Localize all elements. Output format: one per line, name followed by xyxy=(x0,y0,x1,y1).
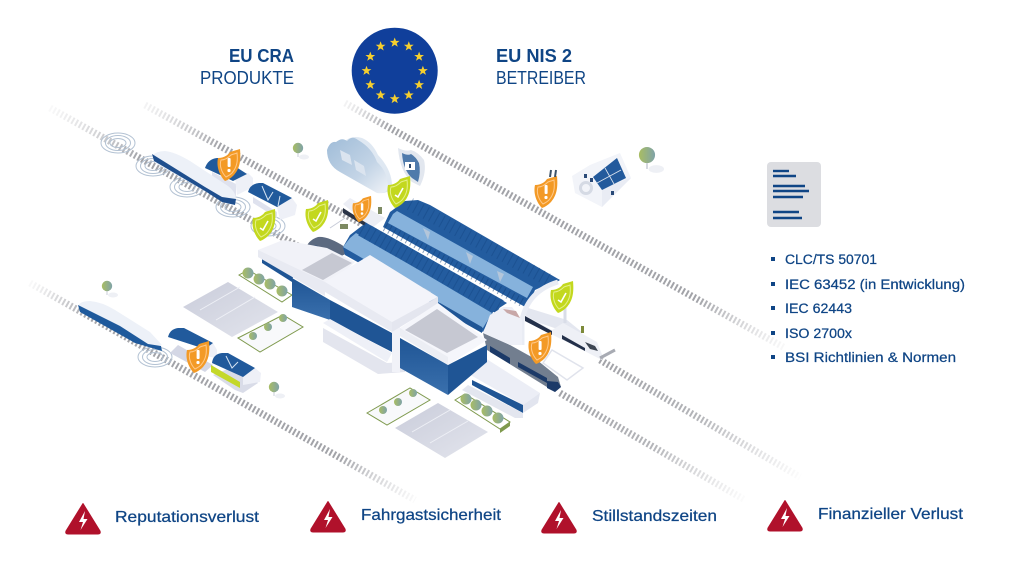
green plots with trees xyxy=(238,268,510,433)
risk: Stillstandszeiten xyxy=(542,502,717,533)
standards list xyxy=(771,252,965,365)
heading: EU NIS 2 Betreiber: EU NIS 2 xyxy=(496,46,572,66)
security shields xyxy=(186,149,573,373)
risk: Finanzieller Verlust xyxy=(768,500,964,531)
platform front xyxy=(462,358,540,418)
heading: EU NIS 2 Betreiber: BETREIBER xyxy=(496,68,586,88)
risk: Reputationsverlust: Reputationsverlust xyxy=(115,509,260,526)
wireless rings xyxy=(101,133,285,367)
station building xyxy=(258,240,487,395)
solar house xyxy=(572,153,631,207)
lock shield icon xyxy=(398,148,425,186)
small station roofs, upper xyxy=(205,158,297,220)
standards list: CLC/TS 50701 xyxy=(785,252,877,267)
risk: Fahrgastsicherheit: Fahrgastsicherheit xyxy=(361,507,502,524)
standards list: BSI Richtlinien & Normen xyxy=(785,350,956,365)
risk: Stillstandszeiten: Stillstandszeiten xyxy=(592,508,717,525)
risk: Finanzieller Verlust: Finanzieller Verlust xyxy=(818,506,964,523)
standards list: IEC 63452 (in Entwicklung) xyxy=(785,277,965,292)
heading: EU CRA Produkte xyxy=(200,46,294,88)
small back platform xyxy=(305,198,385,262)
flag: EU circle xyxy=(352,28,438,114)
heading: EU CRA Produkte: EU CRA xyxy=(229,46,294,66)
risk: Reputationsverlust xyxy=(66,504,260,534)
small train lower xyxy=(78,301,162,351)
front hall end xyxy=(483,307,522,345)
platform outline xyxy=(543,350,583,380)
standards list: ISO 2700x xyxy=(785,326,852,341)
station hall back xyxy=(383,200,560,308)
ICE train xyxy=(525,315,615,360)
document icon xyxy=(767,162,821,227)
standards list: IEC 62443 xyxy=(785,301,852,316)
cloud xyxy=(327,137,392,193)
railway tracks xyxy=(30,103,800,500)
hall arches and ICE platform roof xyxy=(522,282,583,345)
station hall front xyxy=(343,225,507,333)
heading: EU CRA Produkte: PRODUKTE xyxy=(200,68,294,88)
small station roofs, lower xyxy=(168,328,261,393)
heading: EU NIS 2 Betreiber xyxy=(496,46,586,88)
trees xyxy=(102,143,664,398)
small train upper xyxy=(152,151,236,205)
risk: Fahrgastsicherheit xyxy=(311,502,502,532)
regional train xyxy=(483,333,561,392)
parking lots xyxy=(183,282,488,458)
